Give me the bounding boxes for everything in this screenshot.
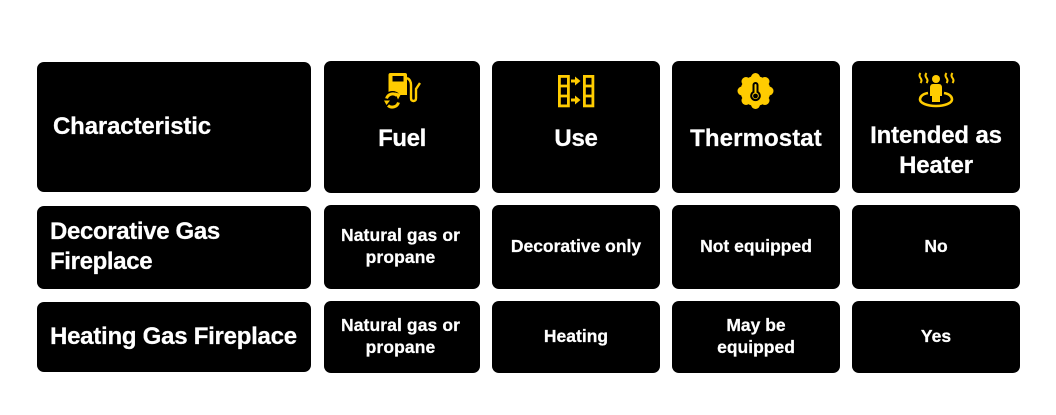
cell text: propane [366,247,435,267]
heading: fuel: Fuel [378,125,426,152]
panel: intended as heater header [852,61,1020,193]
cell text: No [924,236,948,256]
panel: decorative gas fireplace row label [37,206,311,289]
panel: heating heater [852,301,1020,373]
panel: characteristic header [37,62,311,192]
icon: use panels with arrows [558,75,594,108]
cell text: propane [366,337,435,357]
cell text: Heating [544,326,608,346]
row label: decorative gas fireplace [50,218,220,275]
cell text: equipped [717,337,795,357]
icon: fuel pump [384,73,421,109]
cell text: Natural gas or [341,315,460,335]
cell text: Yes [921,326,951,346]
panel: thermostat header [672,61,840,193]
panel: decorative heater [852,205,1020,289]
heading: use: Use [554,125,598,152]
cell text: May be [726,315,786,335]
row label: decorative gas fireplace: Fireplace [50,248,152,275]
heading: intended as heater [870,122,1002,179]
panel: heating gas fireplace row label [37,302,311,372]
cell text: Decorative only [511,236,641,256]
panel: heating use [492,301,660,373]
cell text: Not equipped [700,236,812,256]
cell text [717,315,795,357]
icon: thermostat badge [738,73,774,109]
icon: person with heat waves [918,72,954,108]
panel: decorative use [492,205,660,289]
cell text [341,315,460,357]
panel: use header [492,61,660,193]
panel: heating fuel [324,301,480,373]
panel: fuel header [324,61,480,193]
heading: characteristic: Characteristic [53,113,211,140]
cell text [341,225,460,267]
heading: intended as heater: Intended as [870,122,1002,149]
row label: decorative gas fireplace: Decorative Gas [50,218,220,245]
panel: decorative fuel [324,205,480,289]
panel: heating thermostat [672,301,840,373]
heading: thermostat: Thermostat [690,125,822,152]
cell text: Natural gas or [341,225,460,245]
row label: heating gas fireplace: Heating Gas Fireplace [50,323,297,350]
panel: decorative thermostat [672,205,840,289]
heading: intended as heater: Heater [899,152,973,179]
